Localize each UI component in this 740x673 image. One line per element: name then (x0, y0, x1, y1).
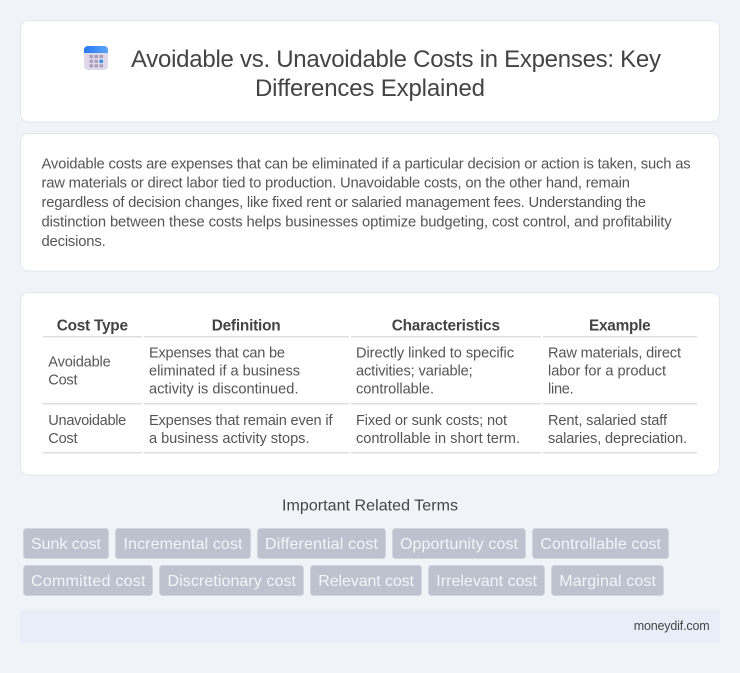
tag: opportunity cost: Opportunity cost (400, 536, 519, 553)
table row: avoidable cost: Expenses that can be (149, 346, 285, 362)
text block: introduction paragraph: regardless of decision changes, like fixed rent or salaried management fees. Understanding the (42, 195, 646, 211)
tag: opportunity cost (392, 528, 526, 558)
tag: discretionary cost: Discretionary cost (168, 573, 297, 590)
tag: sunk cost: Sunk cost (31, 536, 102, 553)
title: Differences Explained (255, 75, 485, 102)
table header: Definition (212, 318, 281, 335)
table row: avoidable cost: Avoidable (48, 355, 111, 371)
tag: incremental cost (116, 528, 250, 558)
table header: Characteristics (392, 318, 500, 335)
tag: controllable cost (532, 528, 668, 558)
footer (20, 610, 720, 643)
tag: relevant cost: Relevant cost (318, 573, 415, 590)
tag: differential cost (258, 528, 386, 558)
table row: avoidable cost: controllable. (356, 382, 434, 398)
table row: unavoidable cost: Fixed or sunk costs; not (356, 413, 507, 429)
table row: avoidable cost: line. (548, 382, 574, 398)
table row: avoidable cost (48, 346, 681, 398)
table row: avoidable cost: activities; variable; (356, 364, 473, 380)
text block: introduction paragraph: decisions. (42, 234, 106, 250)
tag: relevant cost (310, 566, 422, 596)
table row: unavoidable cost: Expenses that remain even if (149, 413, 333, 429)
panel: header (20, 20, 720, 122)
table row: avoidable cost: labor for a product (548, 364, 666, 380)
table row: unavoidable cost: controllable in short term. (356, 431, 520, 447)
table header (57, 318, 651, 335)
table row: avoidable cost: Raw materials, direct (548, 346, 681, 362)
tag: incremental cost: Incremental cost (124, 536, 243, 553)
table row: unavoidable cost: Cost (48, 431, 78, 447)
text block: introduction paragraph (42, 156, 691, 250)
tag: differential cost: Differential cost (265, 536, 379, 553)
table row: unavoidable cost: salaries, depreciation. (548, 431, 687, 447)
table row: avoidable cost: eliminated if a business (149, 364, 300, 380)
panel: comparison table (20, 292, 720, 475)
tag: controllable cost: Controllable cost (540, 536, 662, 553)
table row: unavoidable cost: Rent, salaried staff (548, 413, 668, 429)
icon: calendar (84, 46, 108, 70)
tag: committed cost: Committed cost (31, 573, 146, 590)
tag: discretionary cost (160, 566, 304, 596)
table row: avoidable cost: Directly linked to specific (356, 346, 514, 362)
text block: introduction paragraph: Avoidable costs are expenses that can be eliminated if a particular decision or action is taken, such as (42, 156, 691, 172)
table row: avoidable cost: activity is discontinued. (149, 382, 298, 398)
table row: unavoidable cost: a business activity stops. (149, 431, 310, 447)
table row: unavoidable cost: Unavoidable (48, 413, 126, 429)
tag: marginal cost (552, 566, 664, 596)
panel: introduction (20, 134, 720, 271)
tag: sunk cost (24, 528, 108, 558)
table header: Example (589, 318, 651, 335)
text block: introduction paragraph: raw materials or direct labor tied to production. Unavoidable costs, on the other hand, remain (42, 176, 630, 192)
tag: committed cost (24, 566, 152, 596)
text block: introduction paragraph: distinction between these costs helps businesses optimize budgeting, cost control, and profitability (42, 215, 672, 231)
tag: irrelevant cost (428, 566, 544, 596)
table row: unavoidable cost (48, 413, 687, 447)
tag list: related terms (24, 528, 668, 596)
title (131, 46, 661, 102)
heading: important related terms: Important Related Terms (282, 498, 458, 515)
footer source text: moneydif.com (634, 619, 710, 633)
table row: avoidable cost: Cost (48, 373, 78, 389)
title: Avoidable vs. Unavoidable Costs in Expenses: Key (131, 46, 661, 73)
tag: marginal cost: Marginal cost (559, 573, 657, 590)
table header: Cost Type (57, 318, 128, 335)
tag: irrelevant cost: Irrelevant cost (436, 573, 538, 590)
